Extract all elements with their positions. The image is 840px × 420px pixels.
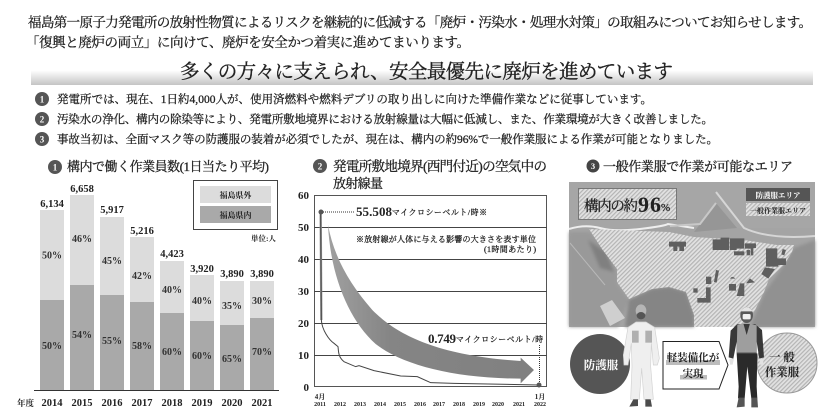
intro text [26,14,812,50]
circle: protective clothing [570,334,630,394]
x axis labels: 2019 [473,402,485,408]
bars [34,195,279,391]
bar percentages: 46% [72,234,92,245]
x axis labels: 2017 [433,402,445,408]
y axis labels: 60 [298,190,310,202]
year axis: 2018 [162,398,182,409]
y axis labels: 20 [298,318,310,330]
x axis labels: 2020 [492,402,504,408]
panel: radiation line chart [298,158,547,408]
x axis labels: 4月 [315,393,325,401]
heading: work area: 3 [591,161,595,171]
y axis labels: 0 [304,382,310,394]
bar percentages: 42% [132,271,152,282]
figure: worker in general clothing [729,307,764,407]
intro text: 「復興と廃炉の両立」に向けて、廃炉を安全かつ着実に進めてまいります。 [26,34,470,50]
y axis labels: 40 [298,254,310,266]
legend [194,180,278,230]
heading: workers: 構内で働く作業員数(1日当たり平均) [67,159,269,174]
bar percentages: 55% [102,336,122,347]
bar percentages: 65% [222,354,242,365]
bar percentages: 50% [42,341,62,352]
year axis [17,398,272,409]
arrow box: lighter clothing [663,342,728,389]
year axis: 2019 [192,398,212,409]
map legend: 一般作業服エリア [750,206,806,215]
bar percentages: 30% [252,296,272,307]
unit label: 単位:人 [251,233,276,243]
callout: 96 percent: 構内の約 [584,198,638,215]
bar percentages: 58% [132,341,152,352]
key points: 2 [40,114,45,124]
key points: 発電所では、現在、1日約4,000人が、使用済燃料や燃料デブリの取り出しに向けた準備作業などに従事しています。 [57,92,652,106]
x axis labels: 2022 [534,402,546,408]
protective clothing area blocks [669,238,786,303]
end point callout: マイクロシーベルト/時 [456,334,543,344]
x axis labels [314,393,546,408]
year axis: 2015 [72,398,92,409]
title band: 多くの方々に支えられ、安全最優先に廃炉を進めています [180,61,673,83]
callout: 96 percent: 96 [638,192,661,217]
x axis labels: 2015 [394,402,406,408]
title band [31,61,813,85]
circle: general clothing: 作業服 [765,365,800,379]
year axis: 2021 [252,398,272,409]
bar totals: 3,890 [250,269,274,280]
general work area hatching [589,229,794,327]
year axis: 2017 [132,398,152,409]
y axis labels: 30 [298,286,310,298]
end point callout: 0.749 [428,331,456,346]
plot grid [314,196,547,386]
circle: general clothing: 一 般 [769,350,795,364]
figure: worker in protective suit [623,304,659,407]
x axis labels: 1月 [535,393,545,401]
x axis labels: 2016 [414,402,426,408]
key points: 汚染水の浄化、構内の除染等により、発電所敷地境界における放射線量は大幅に低減し、また、作業環境が大きく改善しました。 [57,112,713,126]
y axis labels [298,190,310,394]
bar totals: 4,423 [160,249,184,260]
x axis labels: 2013 [354,402,366,408]
x axis labels: 2012 [334,402,346,408]
key points: 3 [40,134,45,144]
year axis: 2016 [102,398,122,409]
bar percentages: 54% [72,330,92,341]
x axis labels: 2021 [513,402,525,408]
bar percentages [42,234,272,365]
bar totals [40,184,274,280]
y axis labels: 10 [298,350,310,362]
bar percentages: 60% [192,351,212,362]
heading: radiation [313,158,547,191]
heading: radiation: 発電所敷地境界(西門付近)の空気中の [333,158,547,174]
legend: 福島県外 [220,190,252,200]
bar totals: 5,216 [130,226,154,237]
start point callout [318,204,487,219]
bar totals: 6,658 [70,184,94,195]
bar percentages: 40% [192,296,212,307]
bar percentages: 35% [222,301,242,312]
key points: 1 [40,94,45,104]
bar percentages: 40% [162,285,182,296]
aerial photo [569,182,815,327]
arrow box: lighter clothing: 軽装備化が [667,351,720,364]
bar percentages: 45% [102,256,122,267]
year axis: 2020 [222,398,242,409]
unit note: (1時間あたり) [484,244,536,254]
x axis labels: 2011 [314,402,326,408]
heading: workers: 1 [53,162,58,172]
heading: radiation: 放射線量 [333,176,383,191]
callout: 96 percent [578,188,676,220]
arrow: decline trend [328,225,534,383]
key points: 事故当初は、全面マスク等の防護服の装着が必須でしたが、現在は、構内の約96%で一般作業服による作業が可能となりました。 [57,132,718,146]
x axis labels: 2018 [453,402,465,408]
bar totals: 3,920 [190,264,214,275]
end point callout [428,331,543,388]
circle: general clothing [757,333,817,393]
y axis labels: 50 [298,222,310,234]
year axis: 年度 [17,398,35,408]
heading: radiation: 2 [318,162,323,172]
unit note [356,234,536,254]
bar percentages: 70% [252,347,272,358]
circle: protective clothing: 防護服 [584,358,619,372]
arrow box: lighter clothing: 実現 [682,367,704,380]
bar totals: 6,134 [40,199,65,210]
bar percentages: 50% [42,250,62,262]
map legend [746,188,810,216]
bar percentages: 60% [162,347,182,358]
radiation line [321,212,539,385]
year axis: 2014 [42,398,63,409]
panel: workers bar chart [17,159,279,409]
heading: work area: 一般作業服で作業が可能なエリア [603,159,793,174]
x axis labels: 2014 [374,402,386,408]
panel: clothing comparison [570,304,817,407]
unit note: ※放射線が人体に与える影響の大きさを表す単位 [356,234,536,244]
start point callout: マイクロシーベルト/時※ [392,207,487,217]
key points [35,92,718,146]
legend: 福島県内 [220,210,252,220]
panel: work area map [569,159,815,327]
start point callout: 55.508 [356,204,392,219]
intro text: 福島第一原子力発電所の放射性物質によるリスクを継続的に低減する「廃炉・汚染水・処理水対策」の取組みについてお知らせします。 [28,14,812,30]
map legend: 防護服エリア [756,190,800,200]
bar totals: 3,890 [220,269,244,280]
bar totals: 5,917 [100,205,124,216]
callout: 96 percent: % [661,202,670,214]
